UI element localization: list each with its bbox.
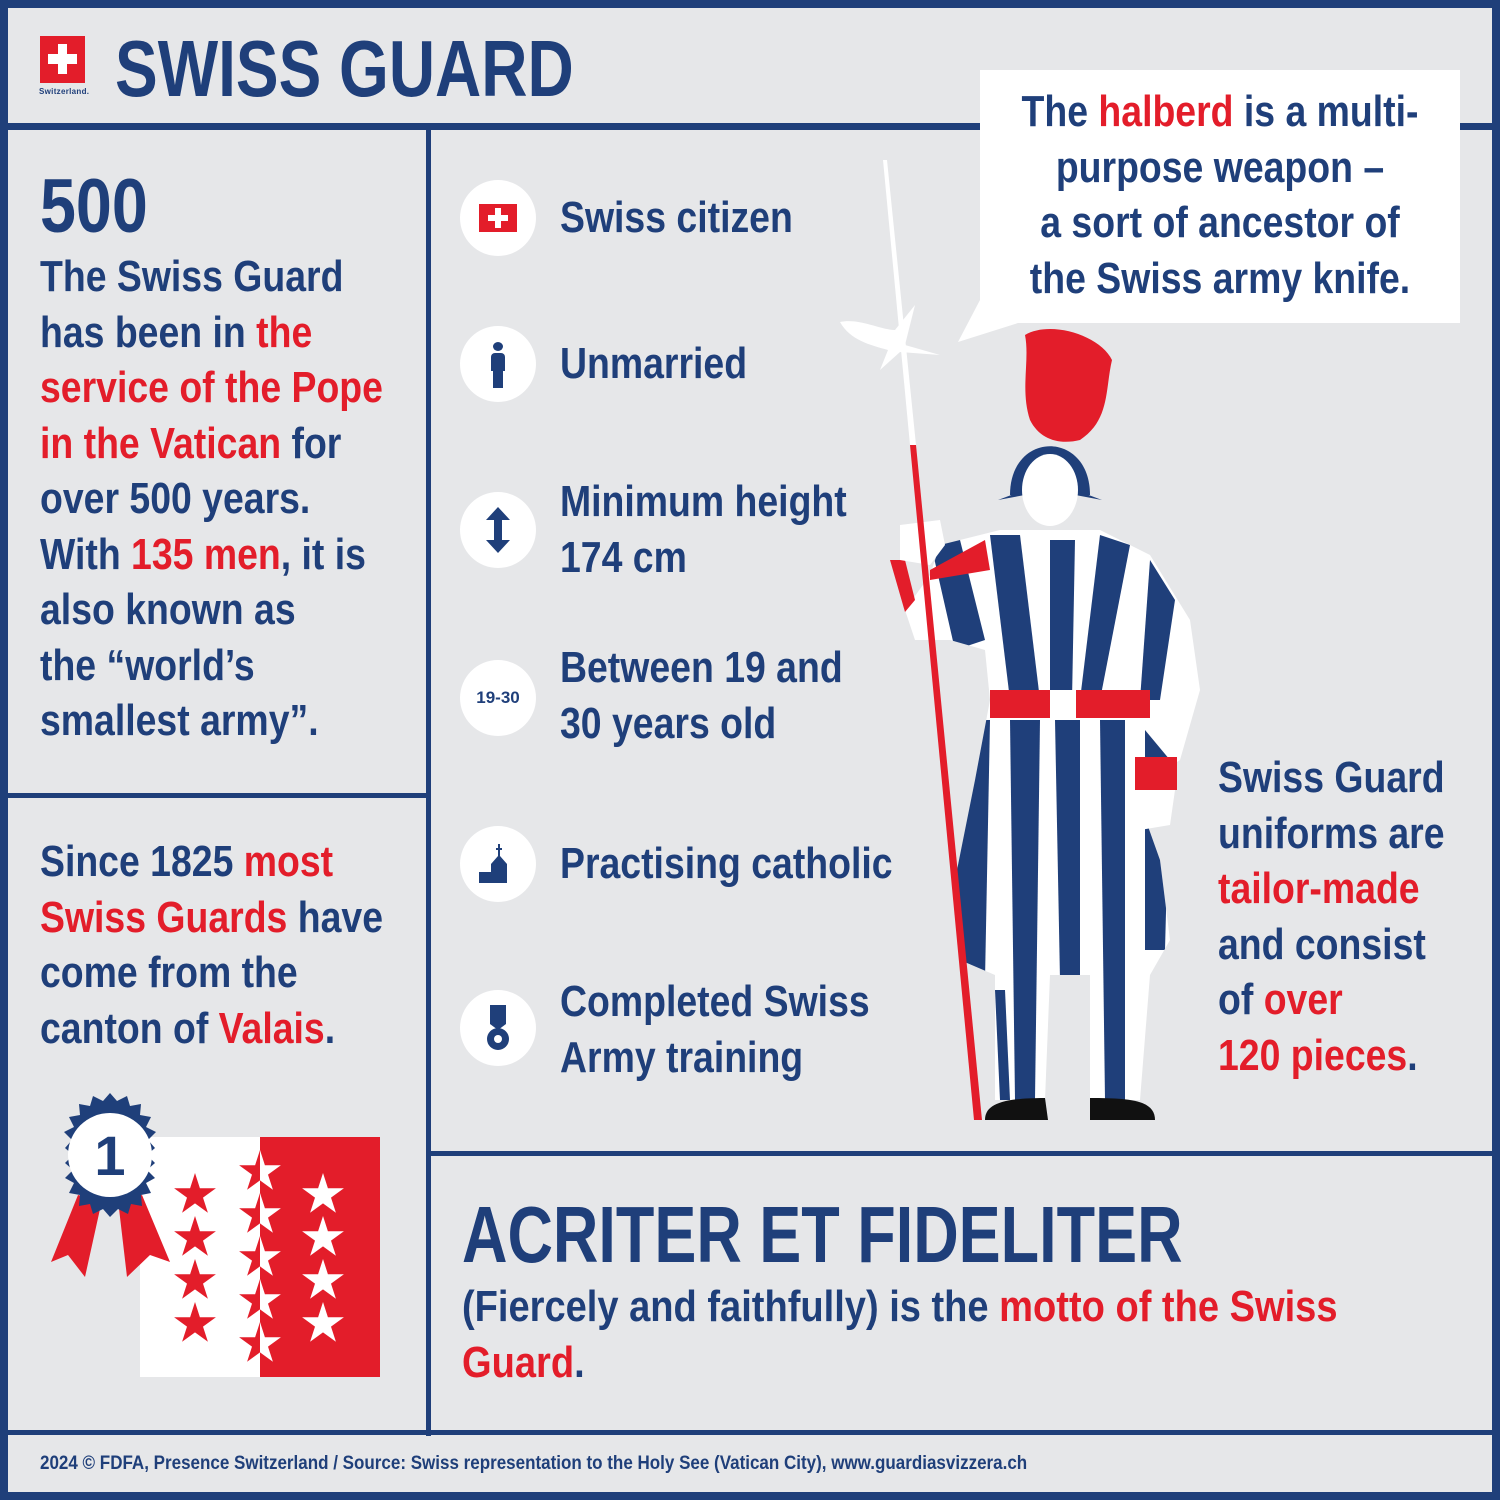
callout: halberd xyxy=(958,70,1460,342)
title: SWISS GUARD xyxy=(115,24,574,113)
icon: medal xyxy=(460,990,536,1066)
panel: Valais text xyxy=(40,837,383,1052)
panel: 500 years: over 500 years. xyxy=(40,474,310,523)
text: uniforms xyxy=(1218,753,1445,1080)
valais flag with badge: 1 xyxy=(94,1124,126,1187)
text: army training: Army training xyxy=(560,1032,803,1082)
text: uniforms: tailor-made xyxy=(1218,864,1420,913)
text: army training xyxy=(560,977,870,1082)
motto text: Guard. xyxy=(462,1338,585,1386)
panel: Valais text: Since 1825 most xyxy=(40,837,333,886)
text: uniforms: 120 pieces. xyxy=(1218,1030,1418,1080)
icon: person xyxy=(460,326,536,402)
text: Minimum height: Minimum height xyxy=(560,477,847,526)
panel: Valais text: canton of Valais. xyxy=(40,1004,335,1052)
panel: 500 years: With 135 men, it is xyxy=(40,530,366,578)
logo: Swiss flag: Switzerland. xyxy=(39,87,89,96)
icon: church xyxy=(460,826,536,902)
panel: 500 years: smallest army”. xyxy=(40,696,319,745)
icon: height arrow xyxy=(460,492,536,568)
motto text: (Fiercely and faithfully) is the motto of the Swiss xyxy=(462,1282,1338,1331)
text: Minimum height: 174 cm xyxy=(560,532,687,582)
text: age: 30 years old xyxy=(560,698,776,748)
text: Unmarried: Unmarried xyxy=(560,339,747,388)
text: age xyxy=(560,643,843,748)
panel: 500 years: has been in the xyxy=(40,308,312,356)
panel: 500 years: The Swiss Guard xyxy=(40,252,343,301)
footer: 2024 © FDFA, Presence Switzerland / Source: Swiss representation to the Holy See (Vatican City), www.guardiasvizzera.ch xyxy=(40,1453,1027,1474)
callout: halberd: purpose weapon – xyxy=(1056,142,1384,192)
text: age: Between 19 and xyxy=(560,643,843,692)
text: uniforms: and consist xyxy=(1218,920,1426,968)
panel: 500 years: 500 xyxy=(40,164,148,249)
valais flag with badge xyxy=(51,1093,380,1377)
text: uniforms: Swiss Guard xyxy=(1218,753,1445,802)
callout: halberd: The halberd is a multi- xyxy=(1022,87,1418,136)
text: uniforms: uniforms are xyxy=(1218,808,1445,858)
icon: swiss flag xyxy=(460,180,536,256)
requirements list xyxy=(460,180,893,1082)
panel: Valais text: Swiss Guards have xyxy=(40,892,383,942)
panel: 500 years: also known as xyxy=(40,585,296,634)
callout: halberd: a sort of ancestor of xyxy=(1040,198,1400,247)
motto heading: ACRITER ET FIDELITER xyxy=(462,1190,1183,1279)
icon: age: 19-30 xyxy=(476,688,520,707)
logo: Swiss flag xyxy=(39,36,89,96)
panel: 500 years: service of the Pope xyxy=(40,363,383,412)
text: Minimum height xyxy=(560,477,847,582)
callout: halberd: the Swiss army knife. xyxy=(1030,254,1410,302)
text: army training: Completed Swiss xyxy=(560,977,870,1026)
text: uniforms: of over xyxy=(1218,975,1343,1024)
guard illustration xyxy=(840,160,1200,1120)
panel: 500 years: the “world’s xyxy=(40,640,255,690)
panel: 500 years xyxy=(40,164,383,745)
panel: Valais text: come from the xyxy=(40,948,298,997)
text: Swiss citizen: Swiss citizen xyxy=(560,193,793,242)
panel: 500 years: in the Vatican for xyxy=(40,418,341,468)
icon: age xyxy=(460,660,536,736)
motto text xyxy=(462,1282,1338,1386)
halberd xyxy=(883,160,916,445)
text: Practising catholic: Practising catholic xyxy=(560,839,893,888)
